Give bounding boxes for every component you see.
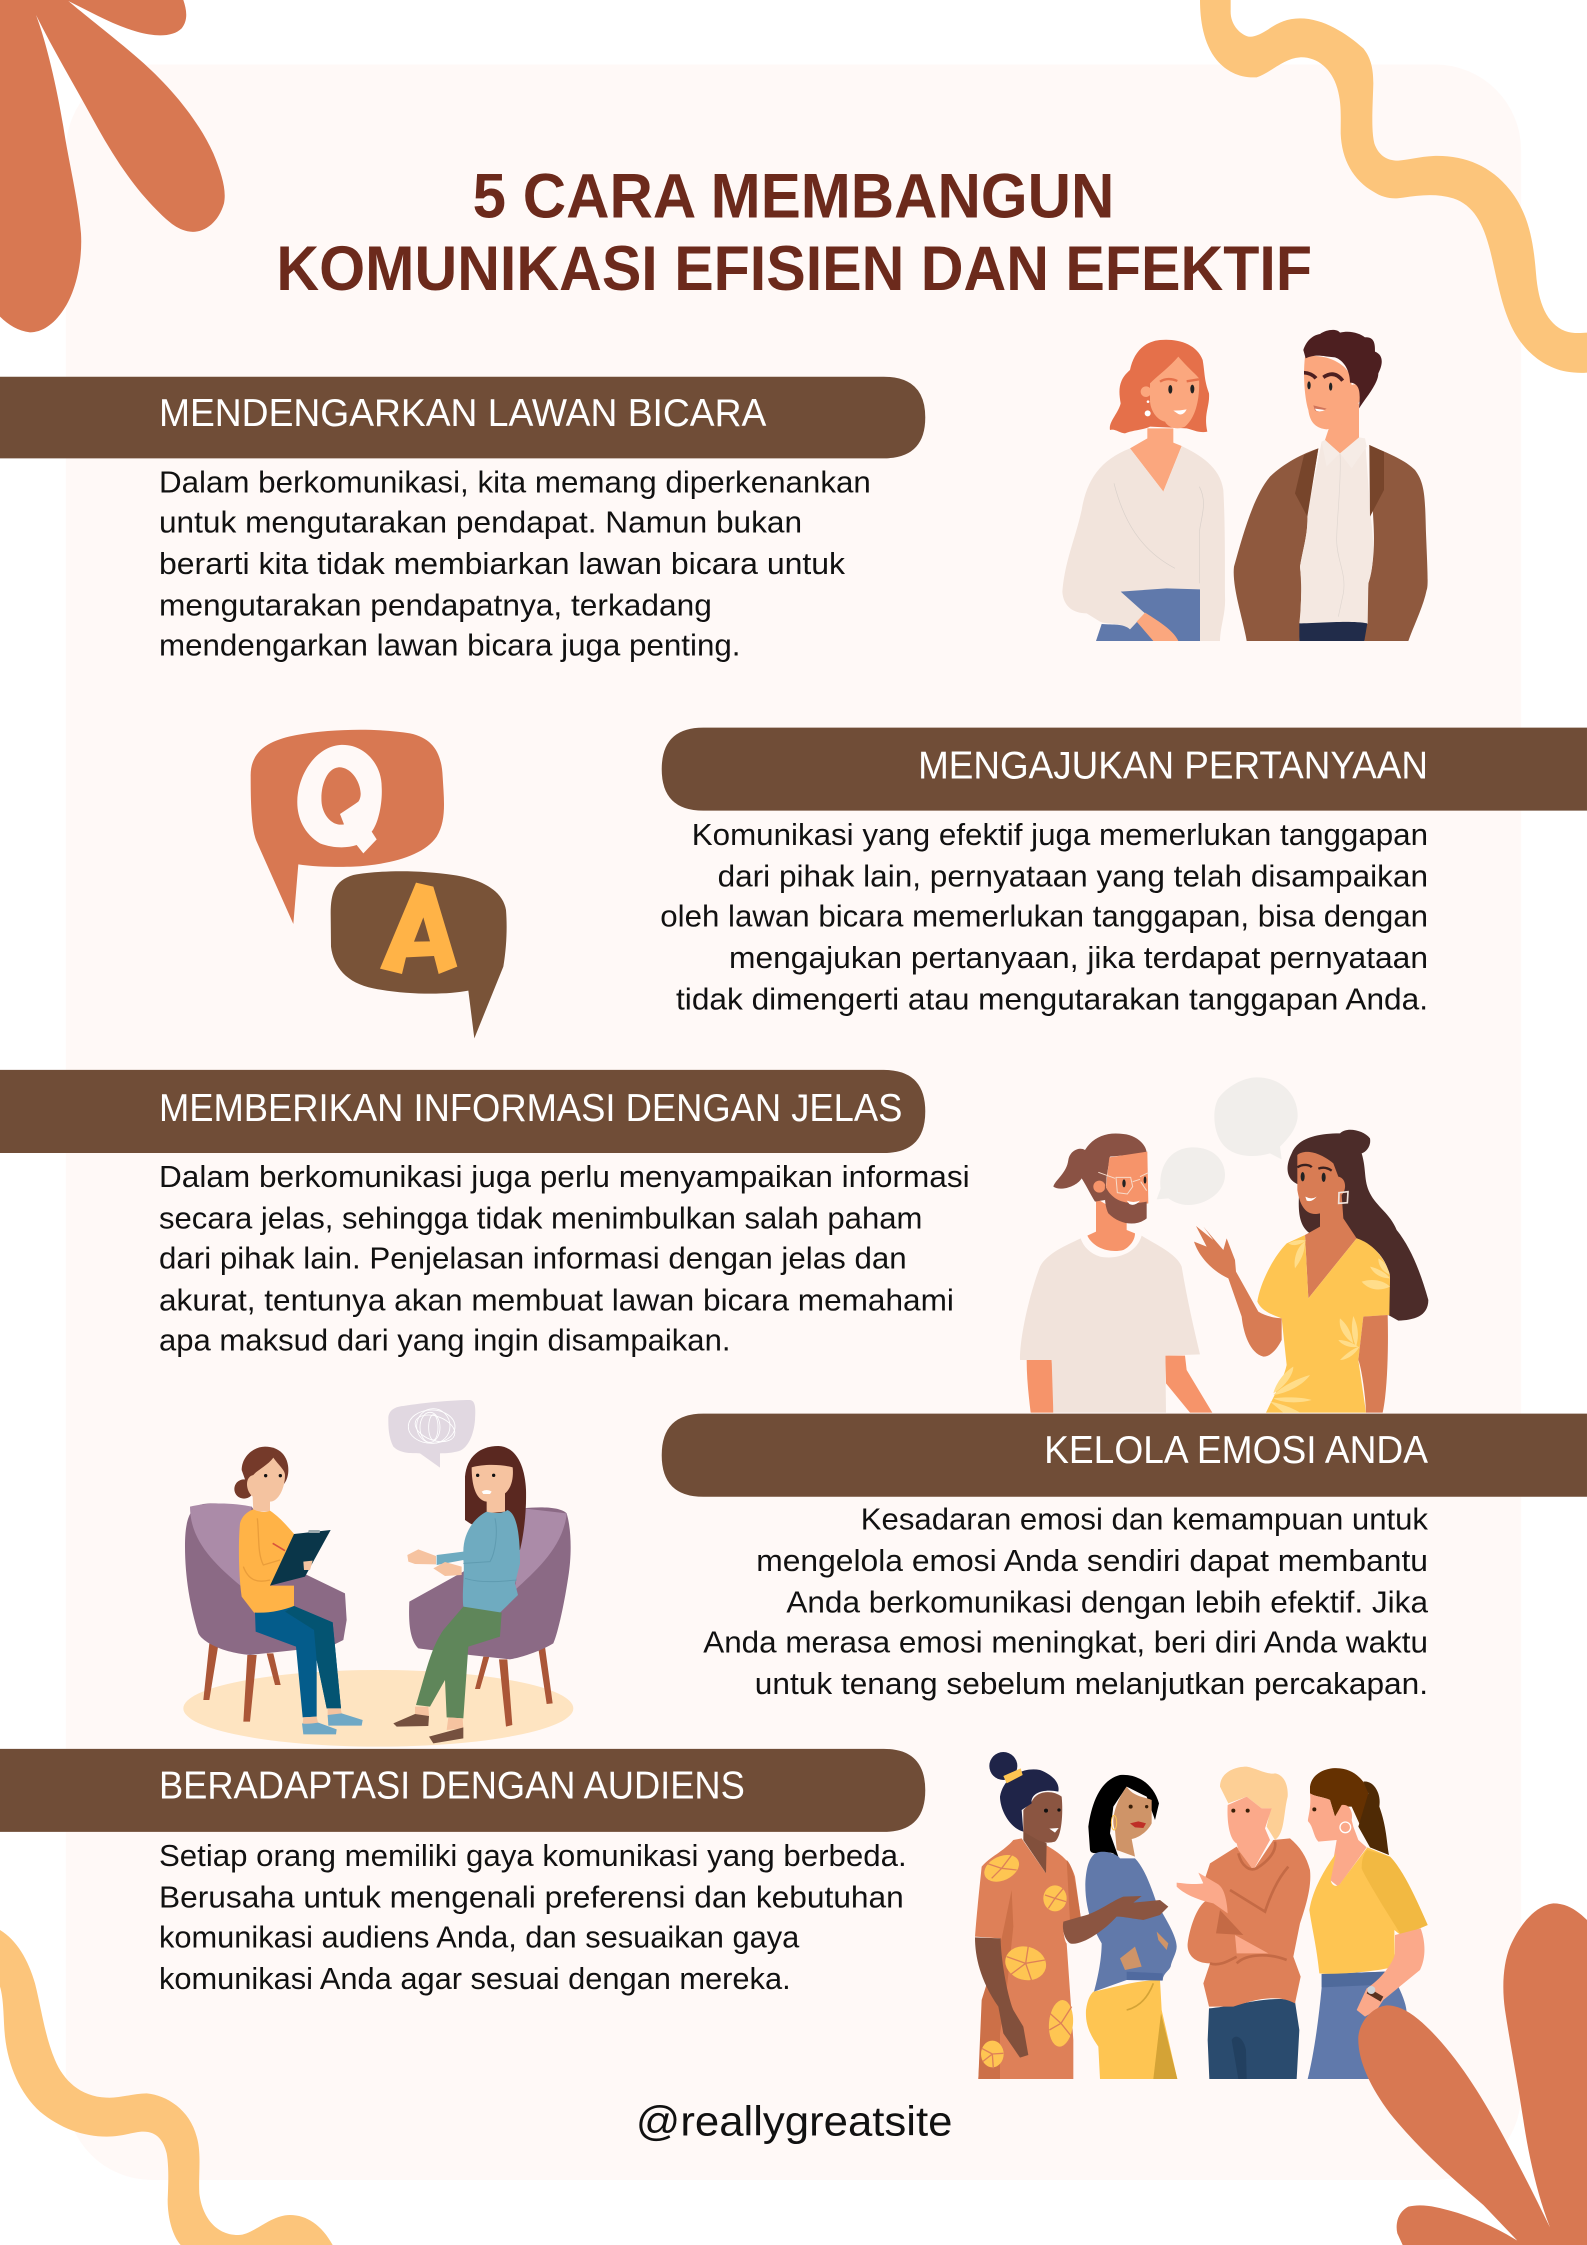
body text 4: Anda berkomunikasi dengan lebih efektif. Jika <box>786 1584 1429 1619</box>
section 1: mendengarkan lawan bicara <box>0 377 925 663</box>
body text 5 <box>159 1838 907 1996</box>
body text 5: komunikasi Anda agar sesuai dengan mereka. <box>159 1961 791 1996</box>
body text 4 <box>703 1501 1429 1701</box>
section 3: memberikan informasi dengan jelas <box>0 1070 970 1357</box>
body text 2 <box>660 817 1428 1016</box>
heading bar 2 <box>662 728 1587 811</box>
body text 3: apa maksud dari yang ingin disampaikan. <box>159 1322 730 1357</box>
body text 1: untuk mengutarakan pendapat. Namun bukan <box>159 505 802 540</box>
illustration: two women sitting on armchairs <box>183 1400 573 1747</box>
body text 3: Dalam berkomunikasi juga perlu menyampaikan informasi <box>159 1159 970 1194</box>
heading bar 4: KELOLA EMOSI ANDA <box>1044 1429 1428 1472</box>
body text 4: Kesadaran emosi dan kemampuan untuk <box>861 1501 1429 1536</box>
footer website handle: @reallygreatsite <box>636 2098 952 2145</box>
icon: A bubble <box>331 871 507 1038</box>
body text 3: akurat, tentunya akan membuat lawan bicara memahami <box>159 1282 954 1317</box>
body text 2: oleh lawan bicara memerlukan tanggapan, bisa dengan <box>660 898 1428 933</box>
body text 5: komunikasi audiens Anda, dan sesuaikan gaya <box>159 1920 800 1955</box>
decoration: top-right yellow wave <box>1200 0 1587 373</box>
body text 2: Komunikasi yang efektif juga memerlukan tanggapan <box>692 817 1428 852</box>
body text 1: mendengarkan lawan bicara juga penting. <box>159 628 740 663</box>
illustration: couple talking <box>1062 330 1428 641</box>
title: 5 CARA MEMBANGUN <box>473 162 1114 232</box>
illustration: man and woman with speech bubbles <box>1020 1077 1428 1413</box>
heading bar 4 <box>662 1414 1587 1497</box>
heading bar 1 <box>0 377 925 458</box>
icon: Q bubble <box>251 730 444 924</box>
heading bar 2: MENGAJUKAN PERTANYAAN <box>918 744 1428 787</box>
heading bar 5 <box>0 1749 925 1832</box>
section 5: beradaptasi dengan audiens <box>0 1749 925 1996</box>
heading bar 5: BERADAPTASI DENGAN AUDIENS <box>159 1764 745 1807</box>
decoration: top-left coral flower <box>0 0 225 332</box>
title: KOMUNIKASI EFISIEN DAN EFEKTIF <box>276 234 1312 304</box>
body text 5: Setiap orang memiliki gaya komunikasi yang berbeda. <box>159 1838 907 1873</box>
body text 1: mengutarakan pendapatnya, terkadang <box>159 588 712 623</box>
title <box>276 162 1312 304</box>
body text 4: Anda merasa emosi meningkat, beri diri Anda waktu <box>703 1625 1428 1660</box>
heading bar 1: MENDENGARKAN LAWAN BICARA <box>159 392 766 435</box>
body text 3 <box>159 1159 970 1357</box>
body text 2: mengajukan pertanyaan, jika terdapat pernyataan <box>729 940 1428 975</box>
body text 1: Dalam berkomunikasi, kita memang diperkenankan <box>159 464 871 499</box>
body text 5: Berusaha untuk mengenali preferensi dan kebutuhan <box>159 1880 904 1915</box>
illustration: group of four people talking <box>975 1752 1428 2079</box>
illustration: Q and A speech bubbles <box>251 730 507 1038</box>
body text 2: dari pihak lain, pernyataan yang telah disampaikan <box>718 858 1428 893</box>
decoration: bottom-right coral flower <box>1358 1903 1587 2245</box>
section 4: kelola emosi anda <box>662 1414 1587 1701</box>
body text 4: mengelola emosi Anda sendiri dapat membantu <box>756 1543 1428 1578</box>
body text 2: tidak dimengerti atau mengutarakan tanggapan Anda. <box>676 981 1428 1016</box>
heading bar 3 <box>0 1070 925 1153</box>
section 2: mengajukan pertanyaan <box>660 728 1587 1016</box>
body text 3: secara jelas, sehingga tidak menimbulkan salah paham <box>159 1201 922 1236</box>
heading bar 3: MEMBERIKAN INFORMASI DENGAN JELAS <box>159 1087 902 1130</box>
body text 3: dari pihak lain. Penjelasan informasi dengan jelas dan <box>159 1241 907 1276</box>
body text 1 <box>159 464 871 663</box>
body text 1: berarti kita tidak membiarkan lawan bicara untuk <box>159 546 846 581</box>
decoration: bottom-left yellow wave <box>0 1930 333 2245</box>
body text 4: untuk tenang sebelum melanjutkan percakapan. <box>755 1666 1428 1701</box>
